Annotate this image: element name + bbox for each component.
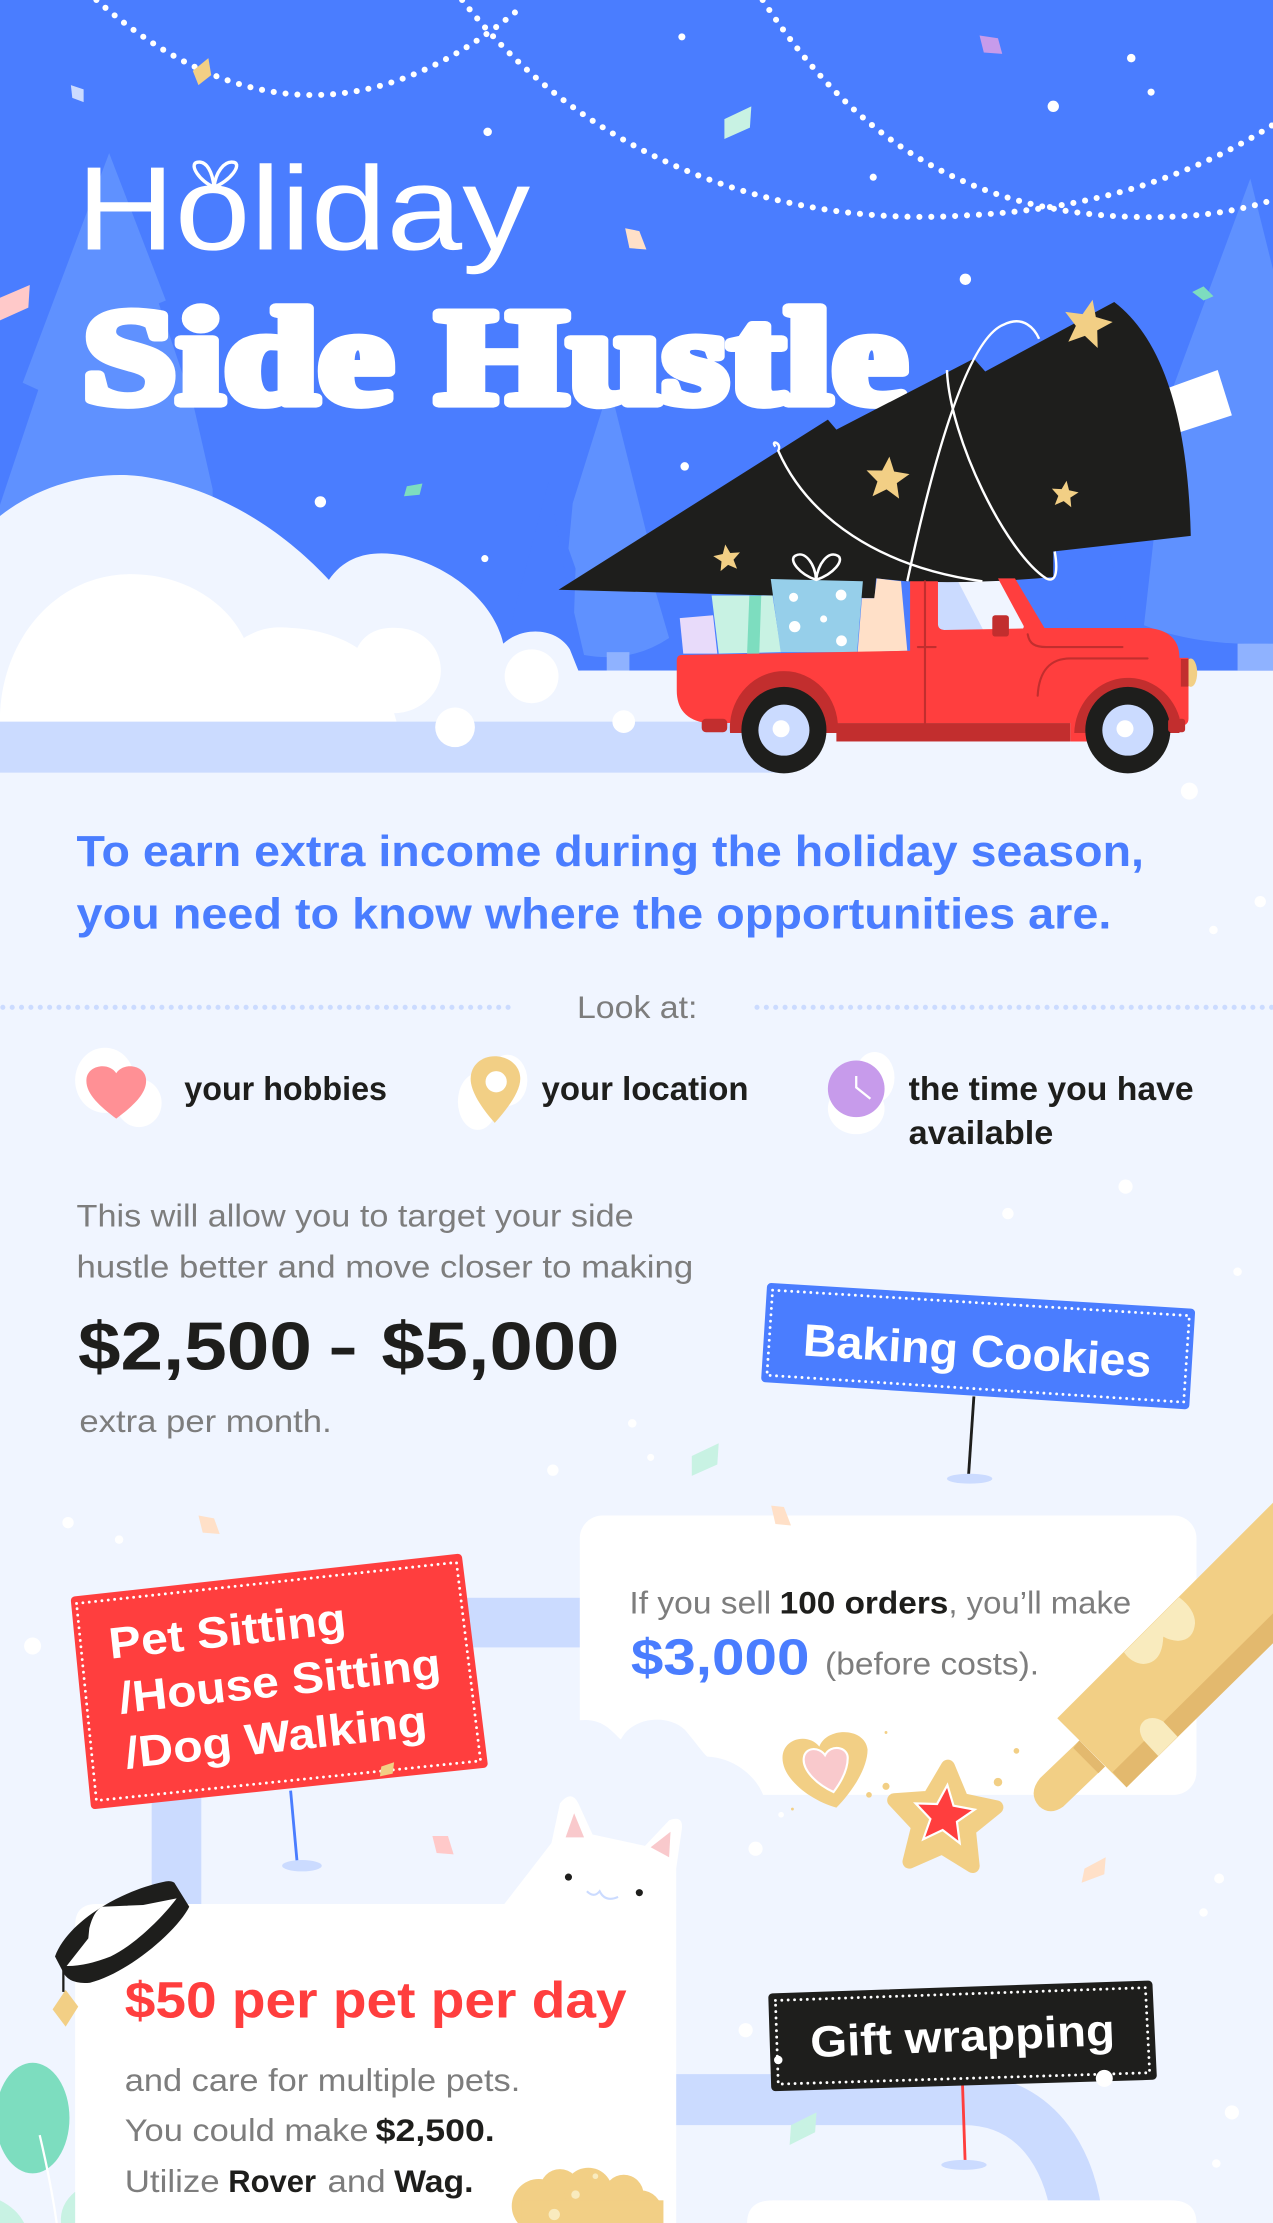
text: multiple pets: and care for multiple pets. (125, 2062, 520, 2098)
sign: pet sitting: Pet Sitting (106, 1594, 348, 1669)
icon: bow on letter o (194, 162, 237, 187)
garland lights (96, 0, 1273, 217)
icon: heart cookie (783, 1732, 868, 1808)
intro text: you need to know where the opportunities are. (77, 890, 1111, 939)
christmas tree (559, 302, 1191, 598)
text: rover and wag: and (327, 2163, 386, 2199)
sign: pet sitting (75, 1558, 483, 1871)
panel: baking income (574, 1516, 1196, 1798)
label: your location: your location (542, 1071, 748, 1108)
cookie crumbs (791, 1731, 1019, 1810)
big figure: $2,500 (78, 1309, 312, 1385)
title: Side Hustle: Side Hustle (82, 283, 907, 433)
icon: small pine tree (507, 482, 581, 671)
icon: pet collar (53, 1881, 189, 2027)
icon: right pine tree (1144, 179, 1273, 671)
snow cloud on panel corner (574, 1720, 764, 1798)
text: could make (125, 2112, 495, 2148)
text: could make: $2,500. (376, 2112, 495, 2148)
icon: gold bush (512, 2168, 663, 2223)
intro text: To earn extra income during the holiday season, (77, 827, 1144, 876)
sign: baking cookies: Baking Cookies (802, 1314, 1153, 1387)
intro text (77, 827, 1144, 939)
text: earnings (631, 1628, 1039, 1685)
heading: per pet rate: $50 per pet per day (125, 1971, 627, 2028)
confetti in sky (0, 35, 1213, 496)
panel: gift wrapping start (747, 2200, 1196, 2223)
cab window (938, 578, 1024, 630)
panel: sky header (0, 0, 1273, 671)
sign: pet sitting: /House Sitting (117, 1640, 443, 1723)
mid snow and confetti (24, 896, 1266, 2168)
illustration: cat (503, 1796, 682, 1905)
text: orders: If you sell (629, 1584, 771, 1620)
icon: location pin (458, 1055, 527, 1130)
truck cab roof pillar (912, 574, 1046, 655)
body text: This will allow you to target your side (77, 1197, 634, 1233)
title: Holiday: Holiday (77, 143, 531, 276)
text: rover and wag (125, 2163, 473, 2199)
icon: left pine tree (0, 153, 213, 567)
rear wheel (730, 671, 838, 773)
text: earnings: $3,000 (631, 1628, 809, 1685)
snow puffs on road (435, 707, 1198, 800)
big figure: – (330, 1309, 356, 1385)
text: rover and wag: Utilize (125, 2163, 220, 2199)
label: the time you have available: the time you have (909, 1071, 1194, 1108)
front wheel (1074, 678, 1185, 773)
panel: pet sitting (75, 1796, 682, 2223)
icon: middle pine tree (568, 397, 669, 671)
body text: hustle better and move closer to making (77, 1248, 693, 1284)
icon: rolling pin (1034, 1503, 1273, 1811)
label: your hobbies: your hobbies (184, 1071, 387, 1108)
tree trunk (1167, 370, 1232, 432)
label: the time you have available: available (909, 1115, 1053, 1152)
sign: pet sitting: /Dog Walking (123, 1697, 429, 1778)
snow cloud (0, 475, 780, 773)
big figure: $5,000 (381, 1309, 619, 1385)
confetti lower (198, 1506, 1106, 2145)
truck body (677, 581, 1189, 741)
body text (77, 1197, 693, 1284)
icon: clock (828, 1052, 895, 1134)
gifts (680, 554, 907, 654)
illustration: truck with tree (559, 295, 1232, 773)
stars (712, 295, 1116, 572)
dotted divider (3, 1005, 1273, 1009)
snow dots in sky (315, 33, 1155, 562)
label: look at: Look at: (577, 989, 697, 1025)
sign: gift wrapping: Gift wrapping (809, 2006, 1116, 2067)
label: the time you have available (909, 1071, 1194, 1152)
text: orders (629, 1584, 1131, 1620)
ropes (774, 321, 1056, 581)
roads behind panels (152, 1598, 1077, 2223)
road (0, 722, 780, 773)
text: could make: You could make (125, 2112, 369, 2148)
big figure (78, 1309, 619, 1385)
label: extra per month: extra per month. (79, 1403, 332, 1439)
sign: gift wrapping (773, 1985, 1153, 2170)
icon: tree behind truck (1063, 489, 1127, 671)
text: orders: , you’ll make (948, 1584, 1131, 1620)
sign: baking cookies (766, 1287, 1191, 1484)
icon: plant (0, 2063, 75, 2223)
text: rover and wag: Rover (228, 2163, 316, 2199)
text: earnings: (before costs). (825, 1645, 1039, 1681)
text: rover and wag: Wag. (394, 2163, 473, 2199)
icon: star cookie (890, 1763, 999, 1867)
text: orders: 100 orders (780, 1584, 948, 1620)
icon: heart (75, 1048, 162, 1127)
